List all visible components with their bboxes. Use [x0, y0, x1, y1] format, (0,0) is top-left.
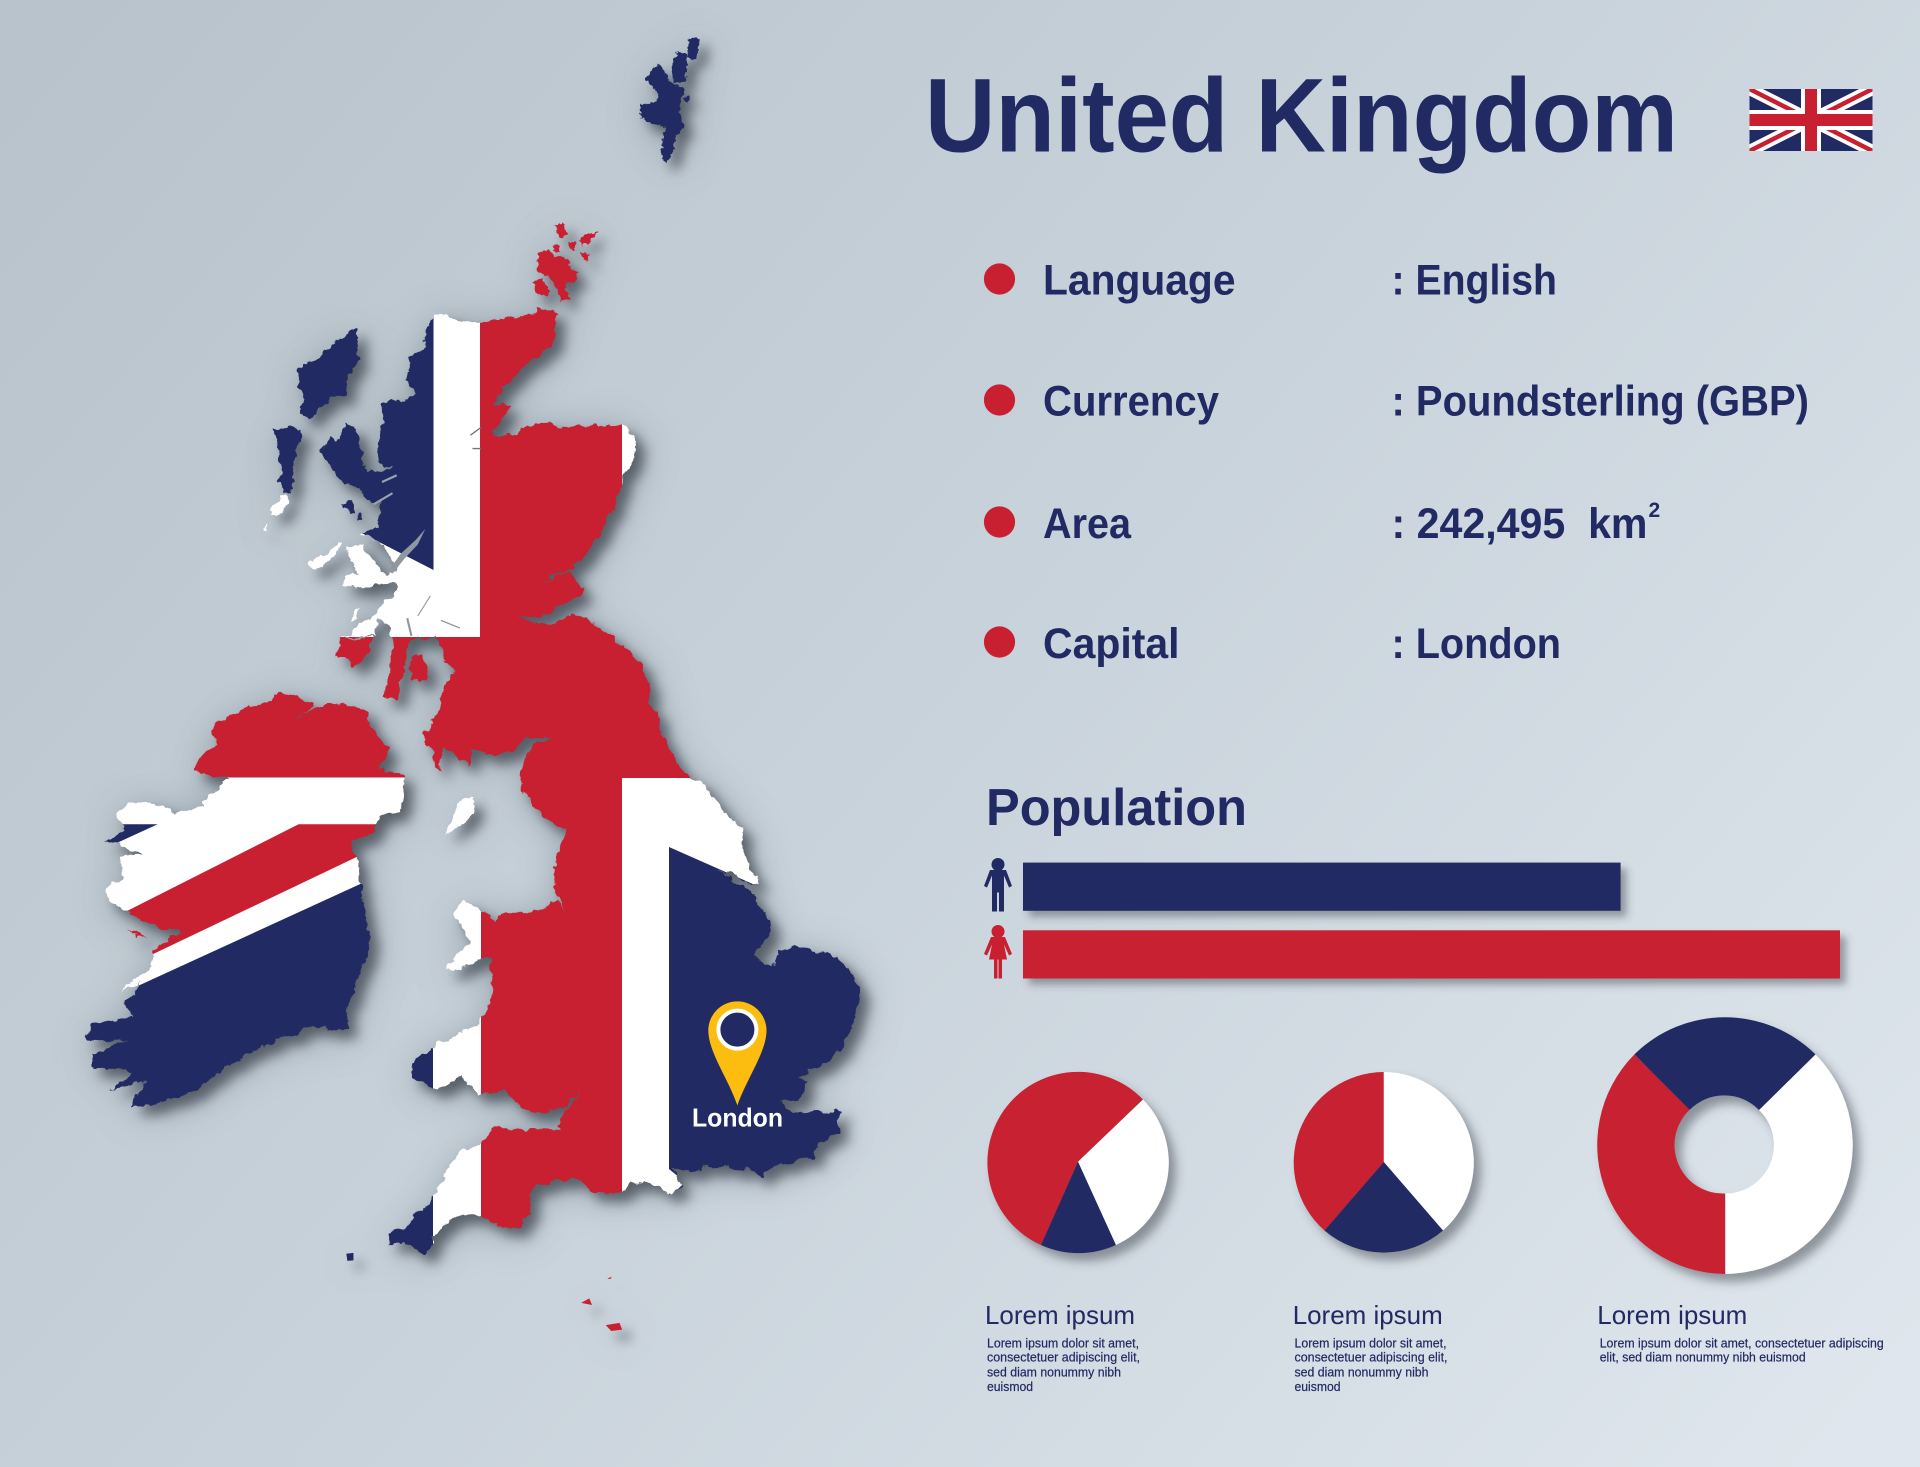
fact: area: Area: [1043, 500, 1132, 548]
icon: female figure: [984, 925, 1012, 978]
fact: area: 2: [1648, 499, 1660, 522]
pie chart 2: [1294, 1072, 1474, 1253]
fact: area: : 242,495 km: [1392, 500, 1648, 548]
fact: language: Language: [1043, 257, 1236, 305]
fact: language: [984, 257, 1557, 305]
caption 1: euismod: [987, 1379, 1033, 1394]
islands: Orkney: [534, 222, 599, 301]
pie chart 1: [987, 1072, 1169, 1253]
map label: London: London: [692, 1102, 783, 1132]
fact: area: [984, 499, 1660, 548]
caption 2: Lorem ipsum dolor sit amet,: [1294, 1335, 1446, 1350]
fact: capital: [984, 620, 1561, 668]
sea lochs and firths: [374, 428, 481, 636]
caption 1: Lorem ipsum: [985, 1300, 1135, 1330]
caption 2: Lorem ipsum: [1293, 1300, 1443, 1330]
caption 1: [985, 1300, 1140, 1394]
fact: currency: : Poundsterling (GBP): [1392, 377, 1809, 425]
heading: Population: Population: [986, 779, 1247, 837]
caption 3: elit, sed diam nonummy nibh euismod: [1600, 1350, 1806, 1365]
caption 2: consectetuer adipiscing elit,: [1294, 1350, 1448, 1365]
fact: currency: Currency: [1043, 377, 1219, 425]
map pin: London: [708, 1001, 766, 1106]
Ireland with flag pattern: [81, 685, 424, 1128]
icon: Union Jack flag: [1750, 89, 1872, 151]
caption 3: Lorem ipsum: [1597, 1300, 1747, 1330]
caption 3: [1597, 1300, 1884, 1365]
bar: female population: [1023, 930, 1840, 978]
caption 3: Lorem ipsum dolor sit amet, consectetuer adipiscing: [1600, 1335, 1884, 1350]
title: United Kingdom: [925, 58, 1678, 174]
facts list: [984, 257, 1809, 668]
fact: capital: Capital: [1043, 620, 1180, 668]
fact: currency: [984, 377, 1809, 425]
caption 1: Lorem ipsum dolor sit amet,: [987, 1335, 1139, 1350]
map: United Kingdom and Ireland in flag colours: [81, 37, 882, 1348]
fact: language: : English: [1392, 257, 1557, 305]
caption 1: sed diam nonummy nibh: [987, 1364, 1121, 1379]
donut chart: [1597, 1017, 1853, 1274]
Great Britain with flag pattern: [263, 302, 882, 1274]
icon: male figure: [984, 858, 1012, 912]
islands: Shetland: [640, 38, 700, 163]
caption 2: euismod: [1294, 1379, 1340, 1394]
caption 1: consectetuer adipiscing elit,: [987, 1350, 1140, 1365]
caption 2: [1293, 1300, 1448, 1394]
bar: male population: [1023, 863, 1621, 911]
islands: Scilly and Channel Islands: [346, 1253, 622, 1331]
fact: capital: : London: [1392, 620, 1561, 668]
caption 2: sed diam nonummy nibh: [1294, 1364, 1428, 1379]
